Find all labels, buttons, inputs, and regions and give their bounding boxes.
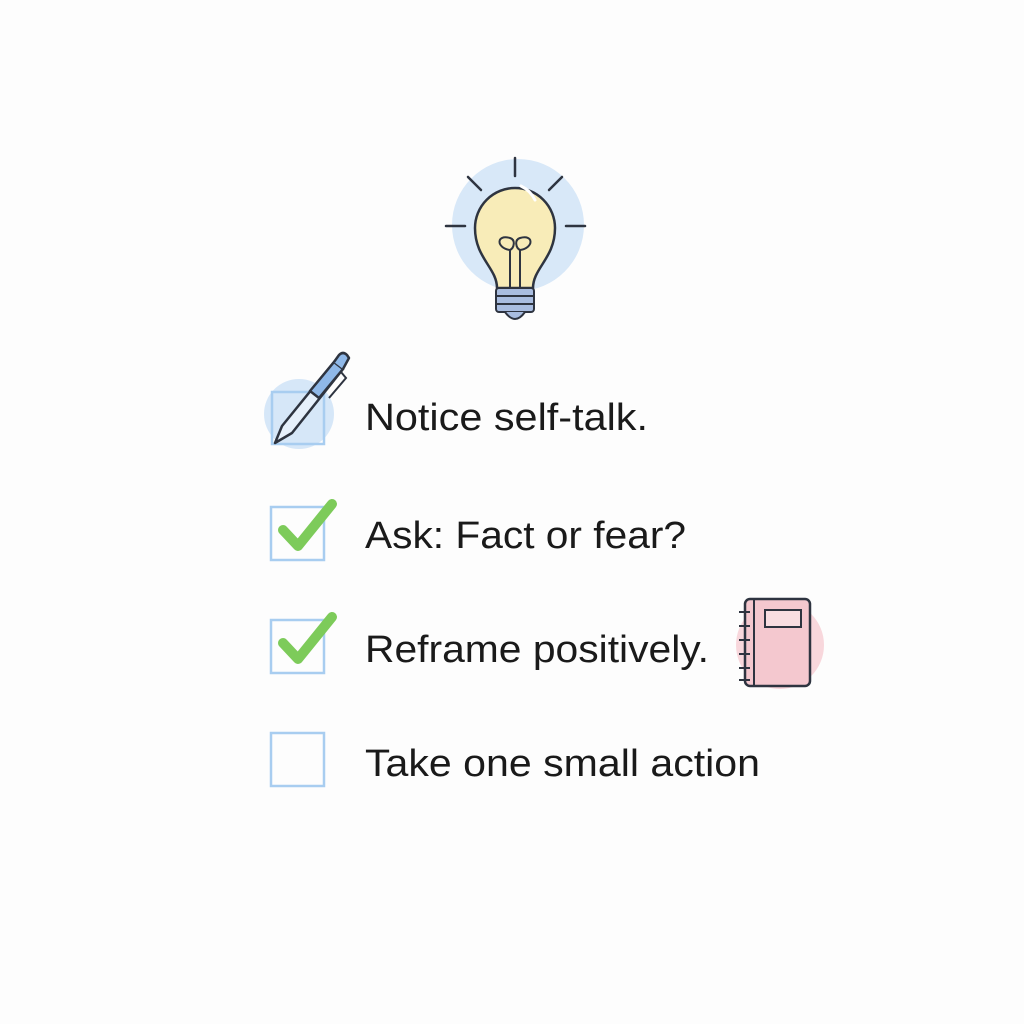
icon: checked box xyxy=(271,504,332,560)
icon: checked box xyxy=(271,617,332,673)
icon: empty box xyxy=(271,733,324,786)
icon: light bulb xyxy=(446,158,585,319)
icon: pen over checkbox xyxy=(264,353,349,449)
text: Reframe positively. xyxy=(365,629,709,671)
item 3: reframe positively xyxy=(271,599,824,689)
item 4: take one small action xyxy=(271,733,760,786)
text: Take one small action xyxy=(365,743,760,785)
icon: notebook xyxy=(736,599,824,689)
text: Ask: Fact or fear? xyxy=(365,515,686,557)
text: Notice self-talk. xyxy=(365,397,648,439)
item 1: notice self-talk xyxy=(264,353,648,449)
item 2: ask fact or fear xyxy=(271,504,686,560)
